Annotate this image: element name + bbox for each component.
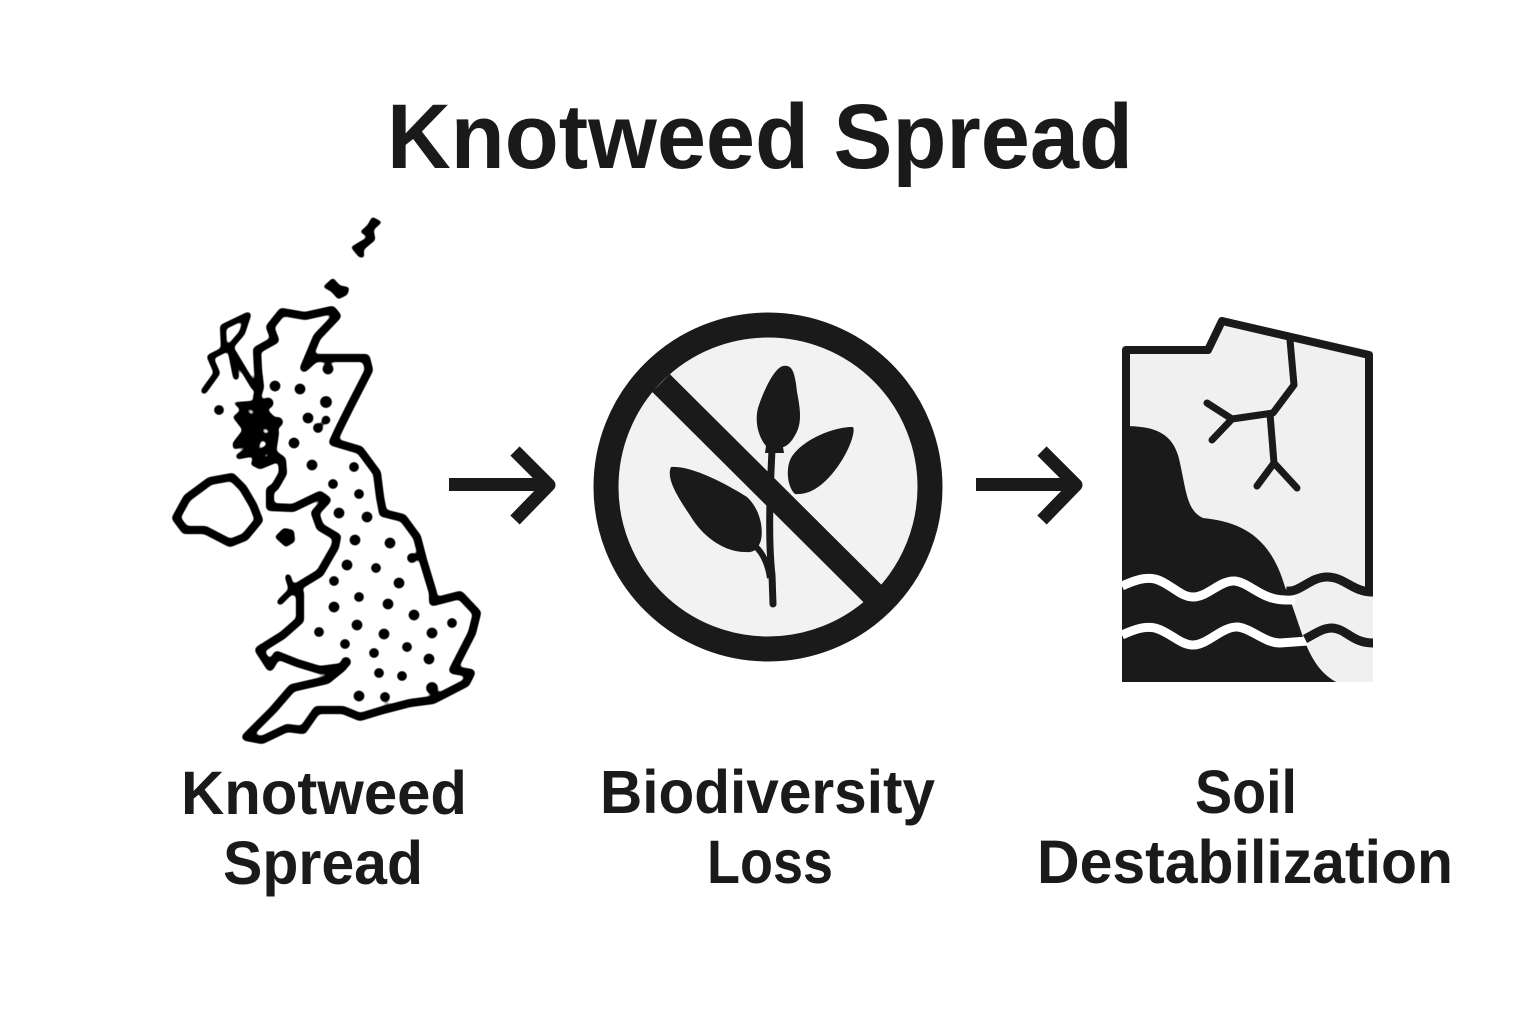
title: Knotweed Spread [387, 86, 1133, 188]
map: Scottish islands cluster [232, 400, 282, 470]
white lower water wave [1122, 627, 1308, 645]
right leaf [788, 427, 854, 494]
map: dots [214, 363, 458, 702]
label: Soil Destabilization: Soil [1195, 758, 1297, 826]
label: Knotweed Spread [181, 759, 467, 897]
map: Orkney [322, 277, 350, 300]
map: Northern Ireland [176, 477, 259, 543]
prohibition circle [606, 325, 930, 649]
map: island gaps [246, 409, 270, 450]
label: Soil Destabilization [1037, 758, 1453, 896]
top leaf [757, 366, 800, 453]
icon: prohibited plant [606, 325, 930, 649]
icon: UK map with knotweed dots [160, 205, 495, 755]
icon: soil destabilization [1122, 317, 1373, 682]
dark lower wave [1305, 628, 1373, 643]
plant stem [770, 450, 773, 604]
prohibition bar [661, 383, 874, 595]
map: Hebrides [204, 315, 254, 391]
arrow: spread to biodiversity loss [449, 451, 549, 520]
eroded dark soil [1122, 426, 1336, 682]
label: Knotweed Spread: Spread [223, 829, 423, 897]
label: Biodiversity Loss: Loss [707, 828, 833, 896]
label: Soil Destabilization: Destabilization [1037, 828, 1453, 896]
crack [1207, 340, 1297, 488]
map: Shetland [350, 216, 383, 258]
label: Knotweed Spread: Knotweed [181, 759, 467, 827]
map: Great Britain outline [246, 310, 477, 740]
label: Biodiversity Loss: Biodiversity [600, 758, 935, 826]
plant branch [755, 546, 770, 578]
dark upper wave [1286, 577, 1373, 592]
arrow: biodiversity loss to soil destabilization [976, 451, 1076, 520]
block outline [1126, 321, 1369, 592]
soil block background [1122, 317, 1373, 682]
left leaf [670, 467, 762, 552]
label: Biodiversity Loss [600, 758, 935, 896]
map: Anglesey spur [280, 577, 292, 602]
white upper water wave [1122, 578, 1295, 600]
map: Isle of Man [276, 529, 294, 546]
